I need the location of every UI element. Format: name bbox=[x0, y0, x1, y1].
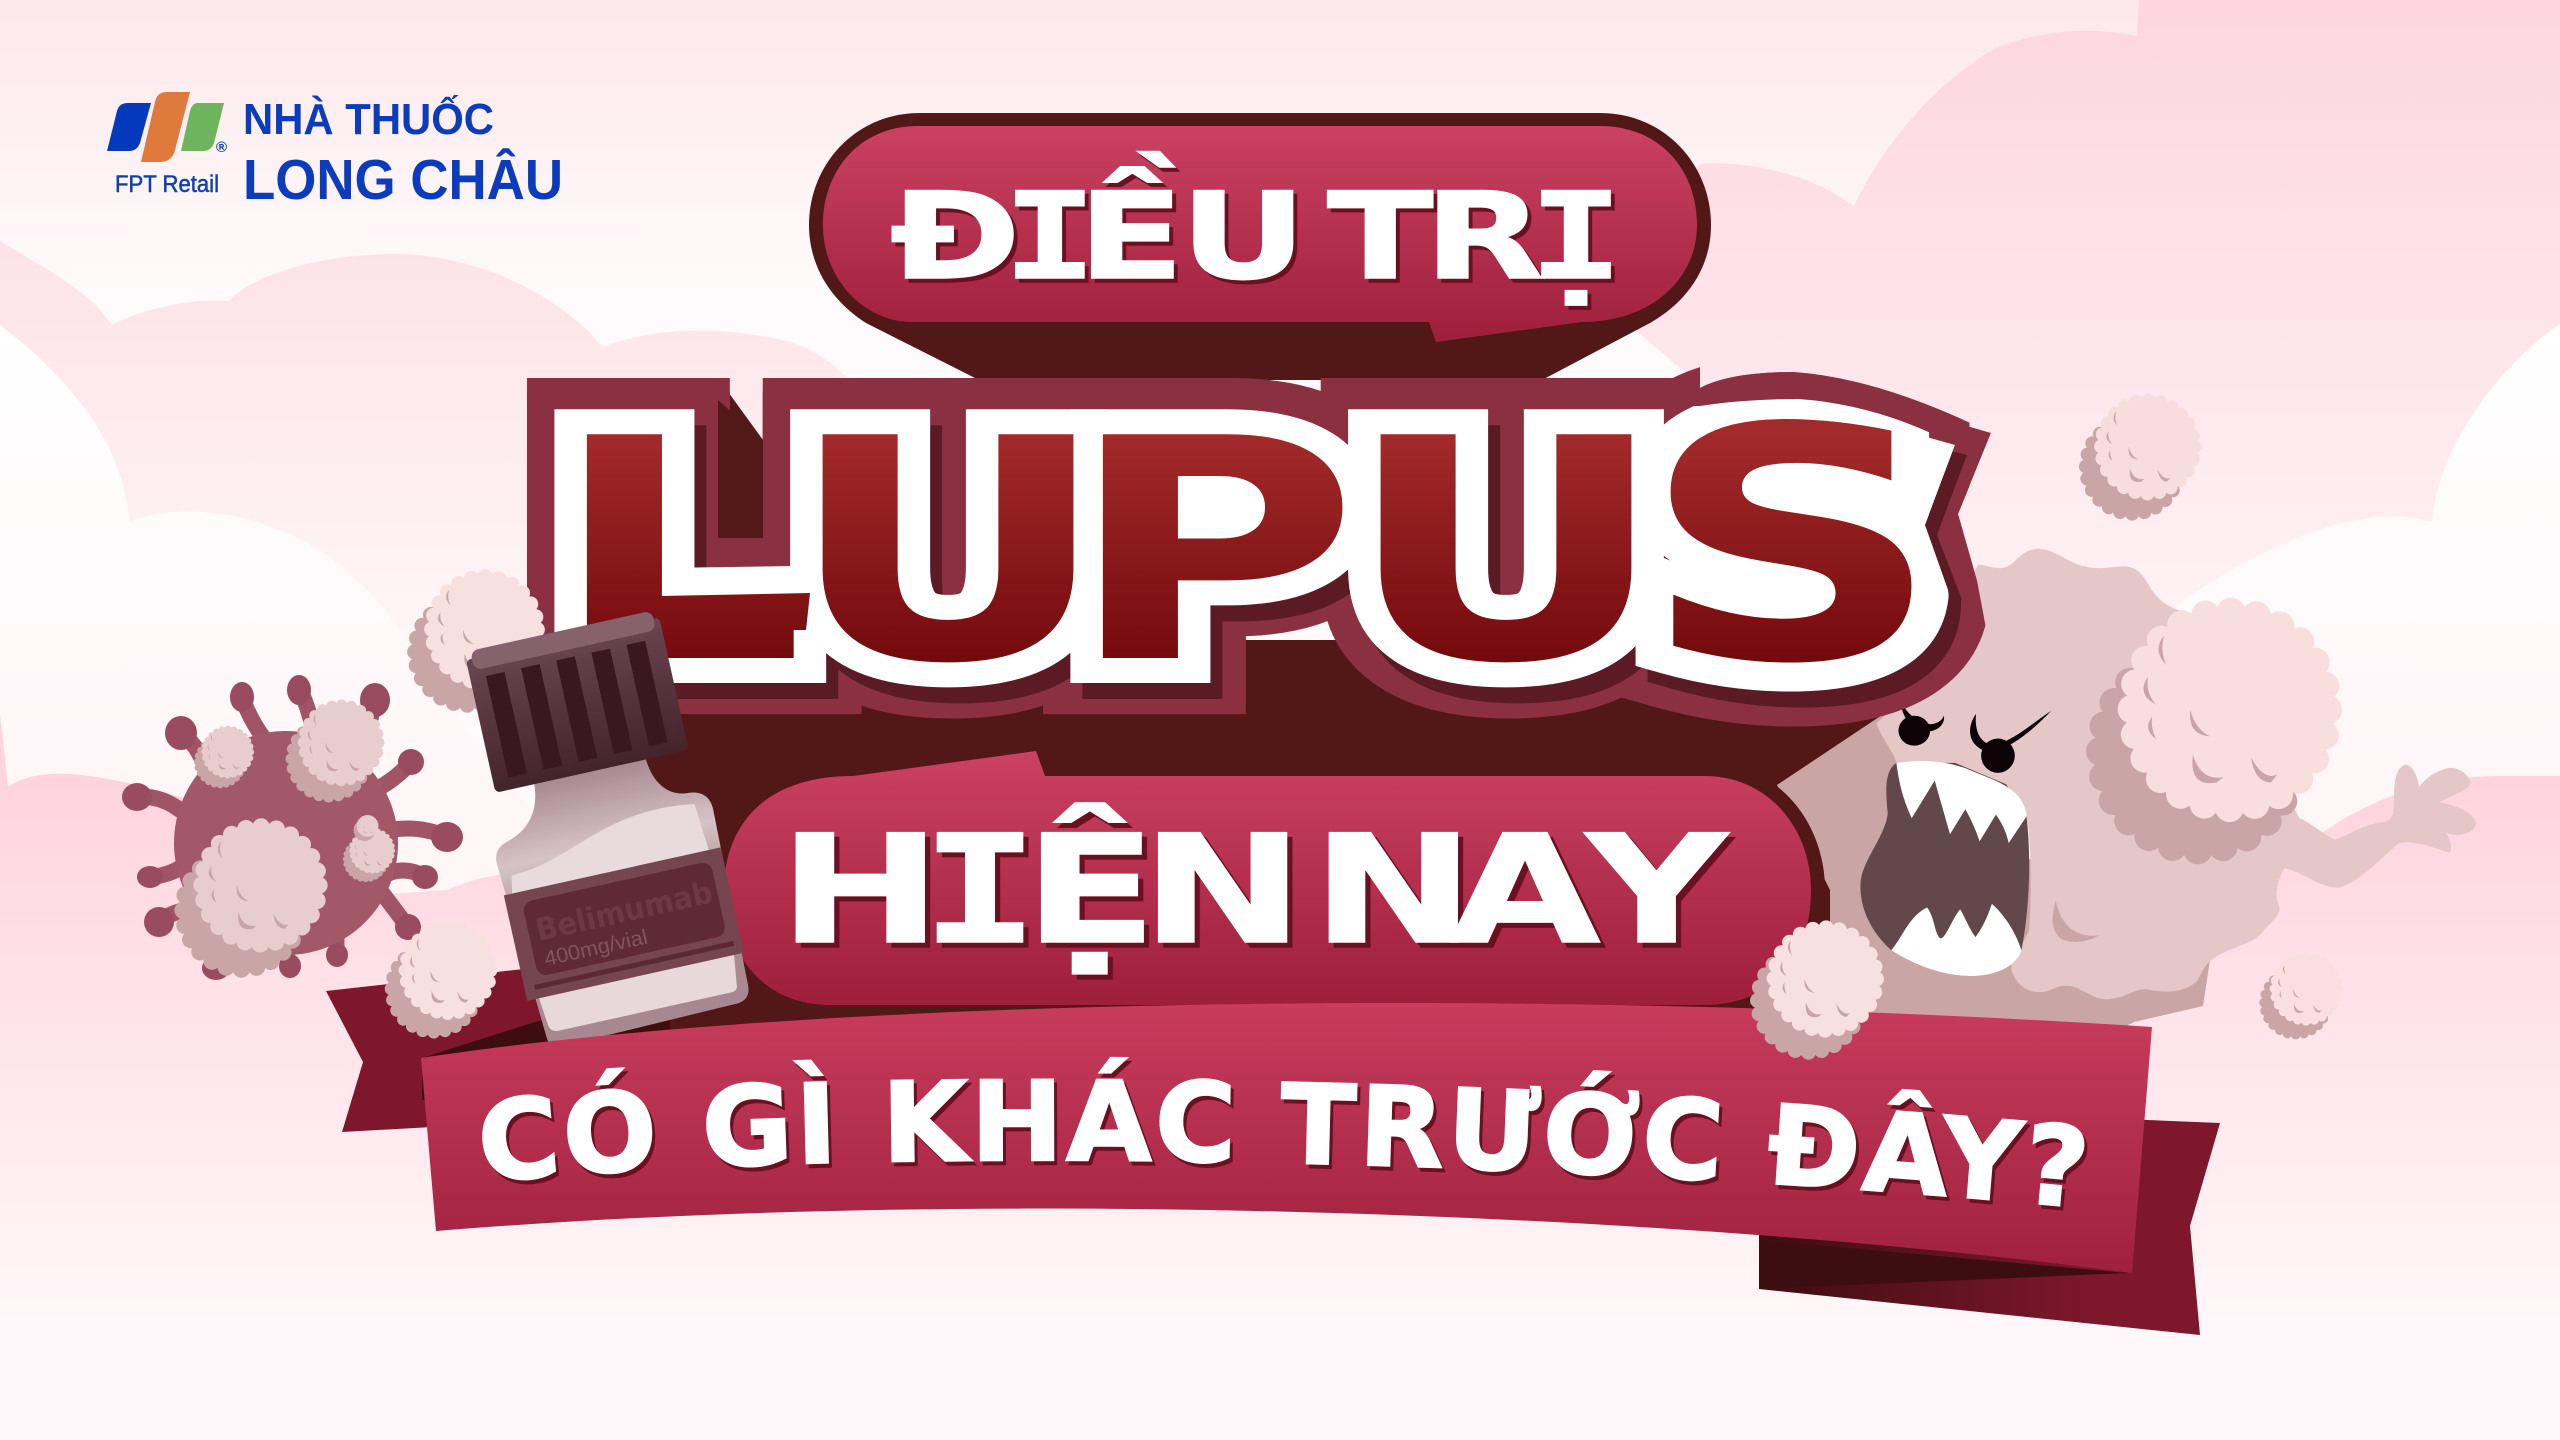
heading: Hiện nay: HIỆN NAY bbox=[779, 801, 1729, 978]
eyes bbox=[1898, 699, 2051, 773]
text: FPT Retail: FPT Retail bbox=[115, 171, 219, 198]
belly crease bbox=[2053, 900, 2099, 942]
panel: second pill bbox=[724, 751, 1811, 1005]
icon: FPT mark: ® bbox=[216, 139, 227, 156]
ribbon left fold bbox=[422, 990, 670, 1100]
monster character bbox=[1860, 549, 2477, 999]
lower teeth bbox=[1891, 904, 2021, 976]
dark inner shadow: LUPUS bbox=[562, 376, 1954, 751]
dark mass behind title bbox=[640, 640, 1912, 1060]
mouth bbox=[1860, 763, 2029, 950]
mauve outline: LUPUS bbox=[554, 353, 1946, 728]
label upper panel bbox=[501, 800, 709, 896]
panel: top pill bbox=[809, 113, 1711, 380]
banner main: CÓ GÌ KHÁC TRƯỚC ĐÂY? bbox=[482, 1056, 2088, 1211]
lower panel bbox=[539, 954, 742, 1033]
bottle body bbox=[480, 742, 756, 1052]
text: Nhà thuốc: NHÀ THUỐC bbox=[243, 93, 494, 144]
monster shadow bbox=[1777, 702, 2210, 1040]
banner main bbox=[421, 1003, 2152, 1273]
icon: cells on virus bbox=[183, 705, 392, 969]
label inner bbox=[522, 861, 727, 977]
banner face bbox=[421, 1003, 2152, 1273]
cell: front of banner bbox=[1758, 928, 1876, 1052]
icon: medicine bottle bbox=[451, 607, 756, 1052]
pill outline bbox=[724, 751, 1811, 1005]
pill face bbox=[724, 751, 1811, 1005]
cell: right small bbox=[2264, 957, 2338, 1035]
subheading on arc bbox=[482, 1160, 2130, 1212]
ribbon right fold bbox=[1759, 1240, 2128, 1289]
ribbon banner bbox=[326, 965, 2220, 1335]
cell: right big bbox=[2100, 612, 2328, 850]
cell: left of bottle bbox=[391, 928, 491, 1032]
virus illustration bbox=[122, 675, 463, 980]
monster body bbox=[1876, 549, 2477, 999]
dark inner shadow bbox=[674, 425, 1967, 708]
logo: FPT Retail Nhà thuốc Long Châu bbox=[107, 92, 563, 212]
heading: Điều trị: ĐIỀU TRỊ bbox=[890, 151, 1623, 306]
text: Long Châu: LONG CHÂU bbox=[243, 147, 563, 212]
heading: Lupus bbox=[550, 353, 1991, 751]
ribbon left tail bbox=[326, 965, 560, 1132]
bottle cap bbox=[464, 609, 689, 793]
pill shadow bbox=[809, 113, 1711, 380]
white outline: LUPUS bbox=[550, 360, 1942, 735]
label band bbox=[504, 847, 744, 1001]
upper teeth bbox=[1896, 761, 2027, 843]
label text: Belimumab: Belimumab bbox=[532, 875, 716, 949]
label text: dose: 400mg/vial bbox=[542, 926, 650, 971]
ribbon right tail bbox=[1759, 1118, 2220, 1335]
dark wedge bbox=[718, 378, 763, 540]
red fill: LUPUS bbox=[550, 360, 1942, 735]
mauve outline: LUPUS bbox=[554, 367, 1946, 742]
cell: top right bbox=[2086, 400, 2194, 514]
cell: above bottle bbox=[415, 577, 537, 705]
icon: FPT mark bbox=[107, 92, 227, 162]
pill face bbox=[823, 126, 1697, 342]
